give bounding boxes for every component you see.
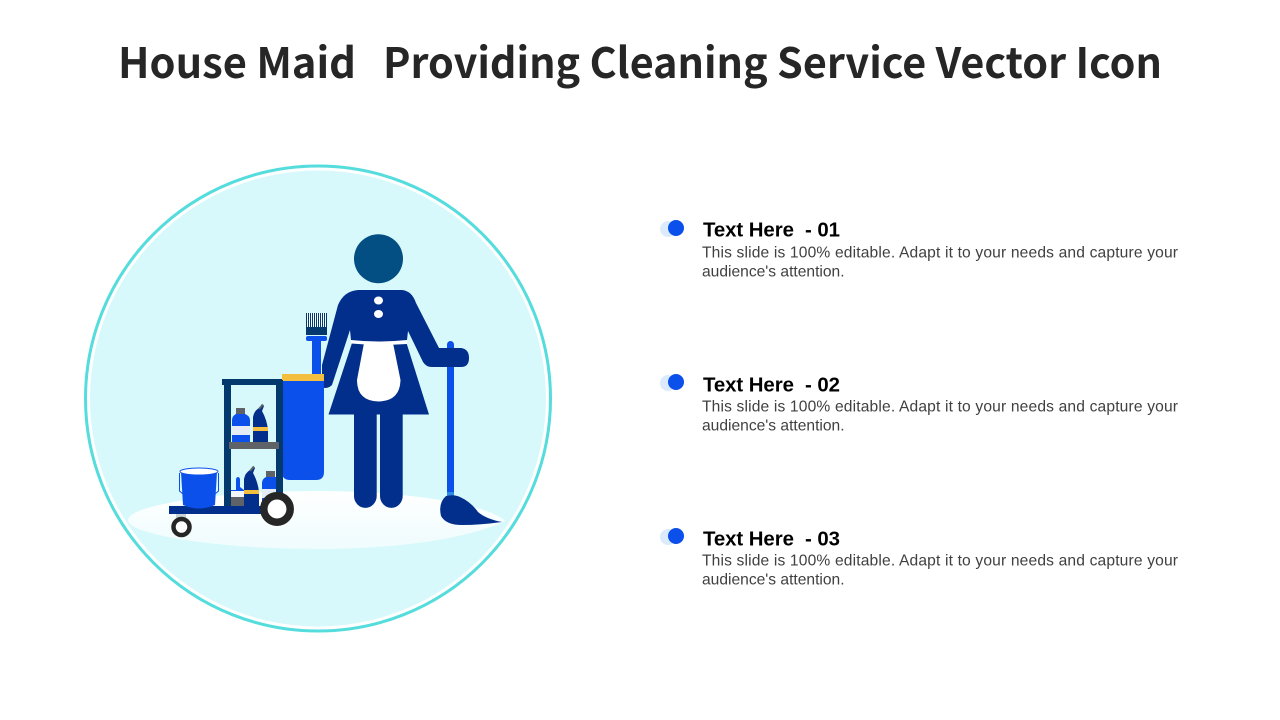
upper bottle <box>232 408 250 442</box>
item 03 <box>660 528 1178 588</box>
apron <box>351 340 407 402</box>
heading: Text Here - 01 <box>703 220 840 242</box>
upper spray bottle <box>253 404 268 442</box>
small wheel <box>174 514 190 535</box>
cleaning cart <box>169 374 324 535</box>
description <box>702 244 1178 280</box>
maid figure <box>322 234 469 508</box>
mop <box>440 341 502 525</box>
shelf <box>229 442 279 449</box>
bag <box>282 374 324 480</box>
description: audience's attention. <box>702 264 845 280</box>
description: This slide is 100% editable. Adapt it to your needs and capture your <box>702 552 1178 570</box>
lower brush bottle <box>231 477 244 506</box>
description: This slide is 100% editable. Adapt it to your needs and capture your <box>702 244 1178 262</box>
buttons <box>374 296 383 318</box>
heading: Text Here - 02 <box>703 374 840 396</box>
description <box>702 398 1178 434</box>
floor ellipse <box>128 491 505 549</box>
large wheel <box>264 496 290 522</box>
cart frame <box>222 379 283 508</box>
item 01 <box>660 220 1178 280</box>
lower bottle <box>262 471 276 506</box>
description: audience's attention. <box>702 418 845 434</box>
torso and arms <box>322 290 469 388</box>
legs <box>354 405 403 508</box>
title: House Maid <box>118 30 356 91</box>
bullet <box>660 374 684 391</box>
item 02 <box>660 374 1178 434</box>
description: audience's attention. <box>702 572 845 588</box>
lower spray bottle <box>244 466 259 506</box>
description <box>702 552 1178 588</box>
bullet <box>660 220 684 237</box>
heading: Text Here - 03 <box>703 528 840 550</box>
background circle <box>86 166 550 631</box>
title: Providing Cleaning Service Vector Icon <box>383 30 1162 91</box>
brush held in bag <box>306 313 327 377</box>
illustration: housemaid in circle <box>86 166 550 631</box>
cart base <box>169 506 269 514</box>
description: This slide is 100% editable. Adapt it to your needs and capture your <box>702 398 1178 416</box>
bullet <box>660 528 684 545</box>
bucket <box>180 468 218 508</box>
skirt <box>328 343 429 414</box>
head <box>354 234 403 283</box>
